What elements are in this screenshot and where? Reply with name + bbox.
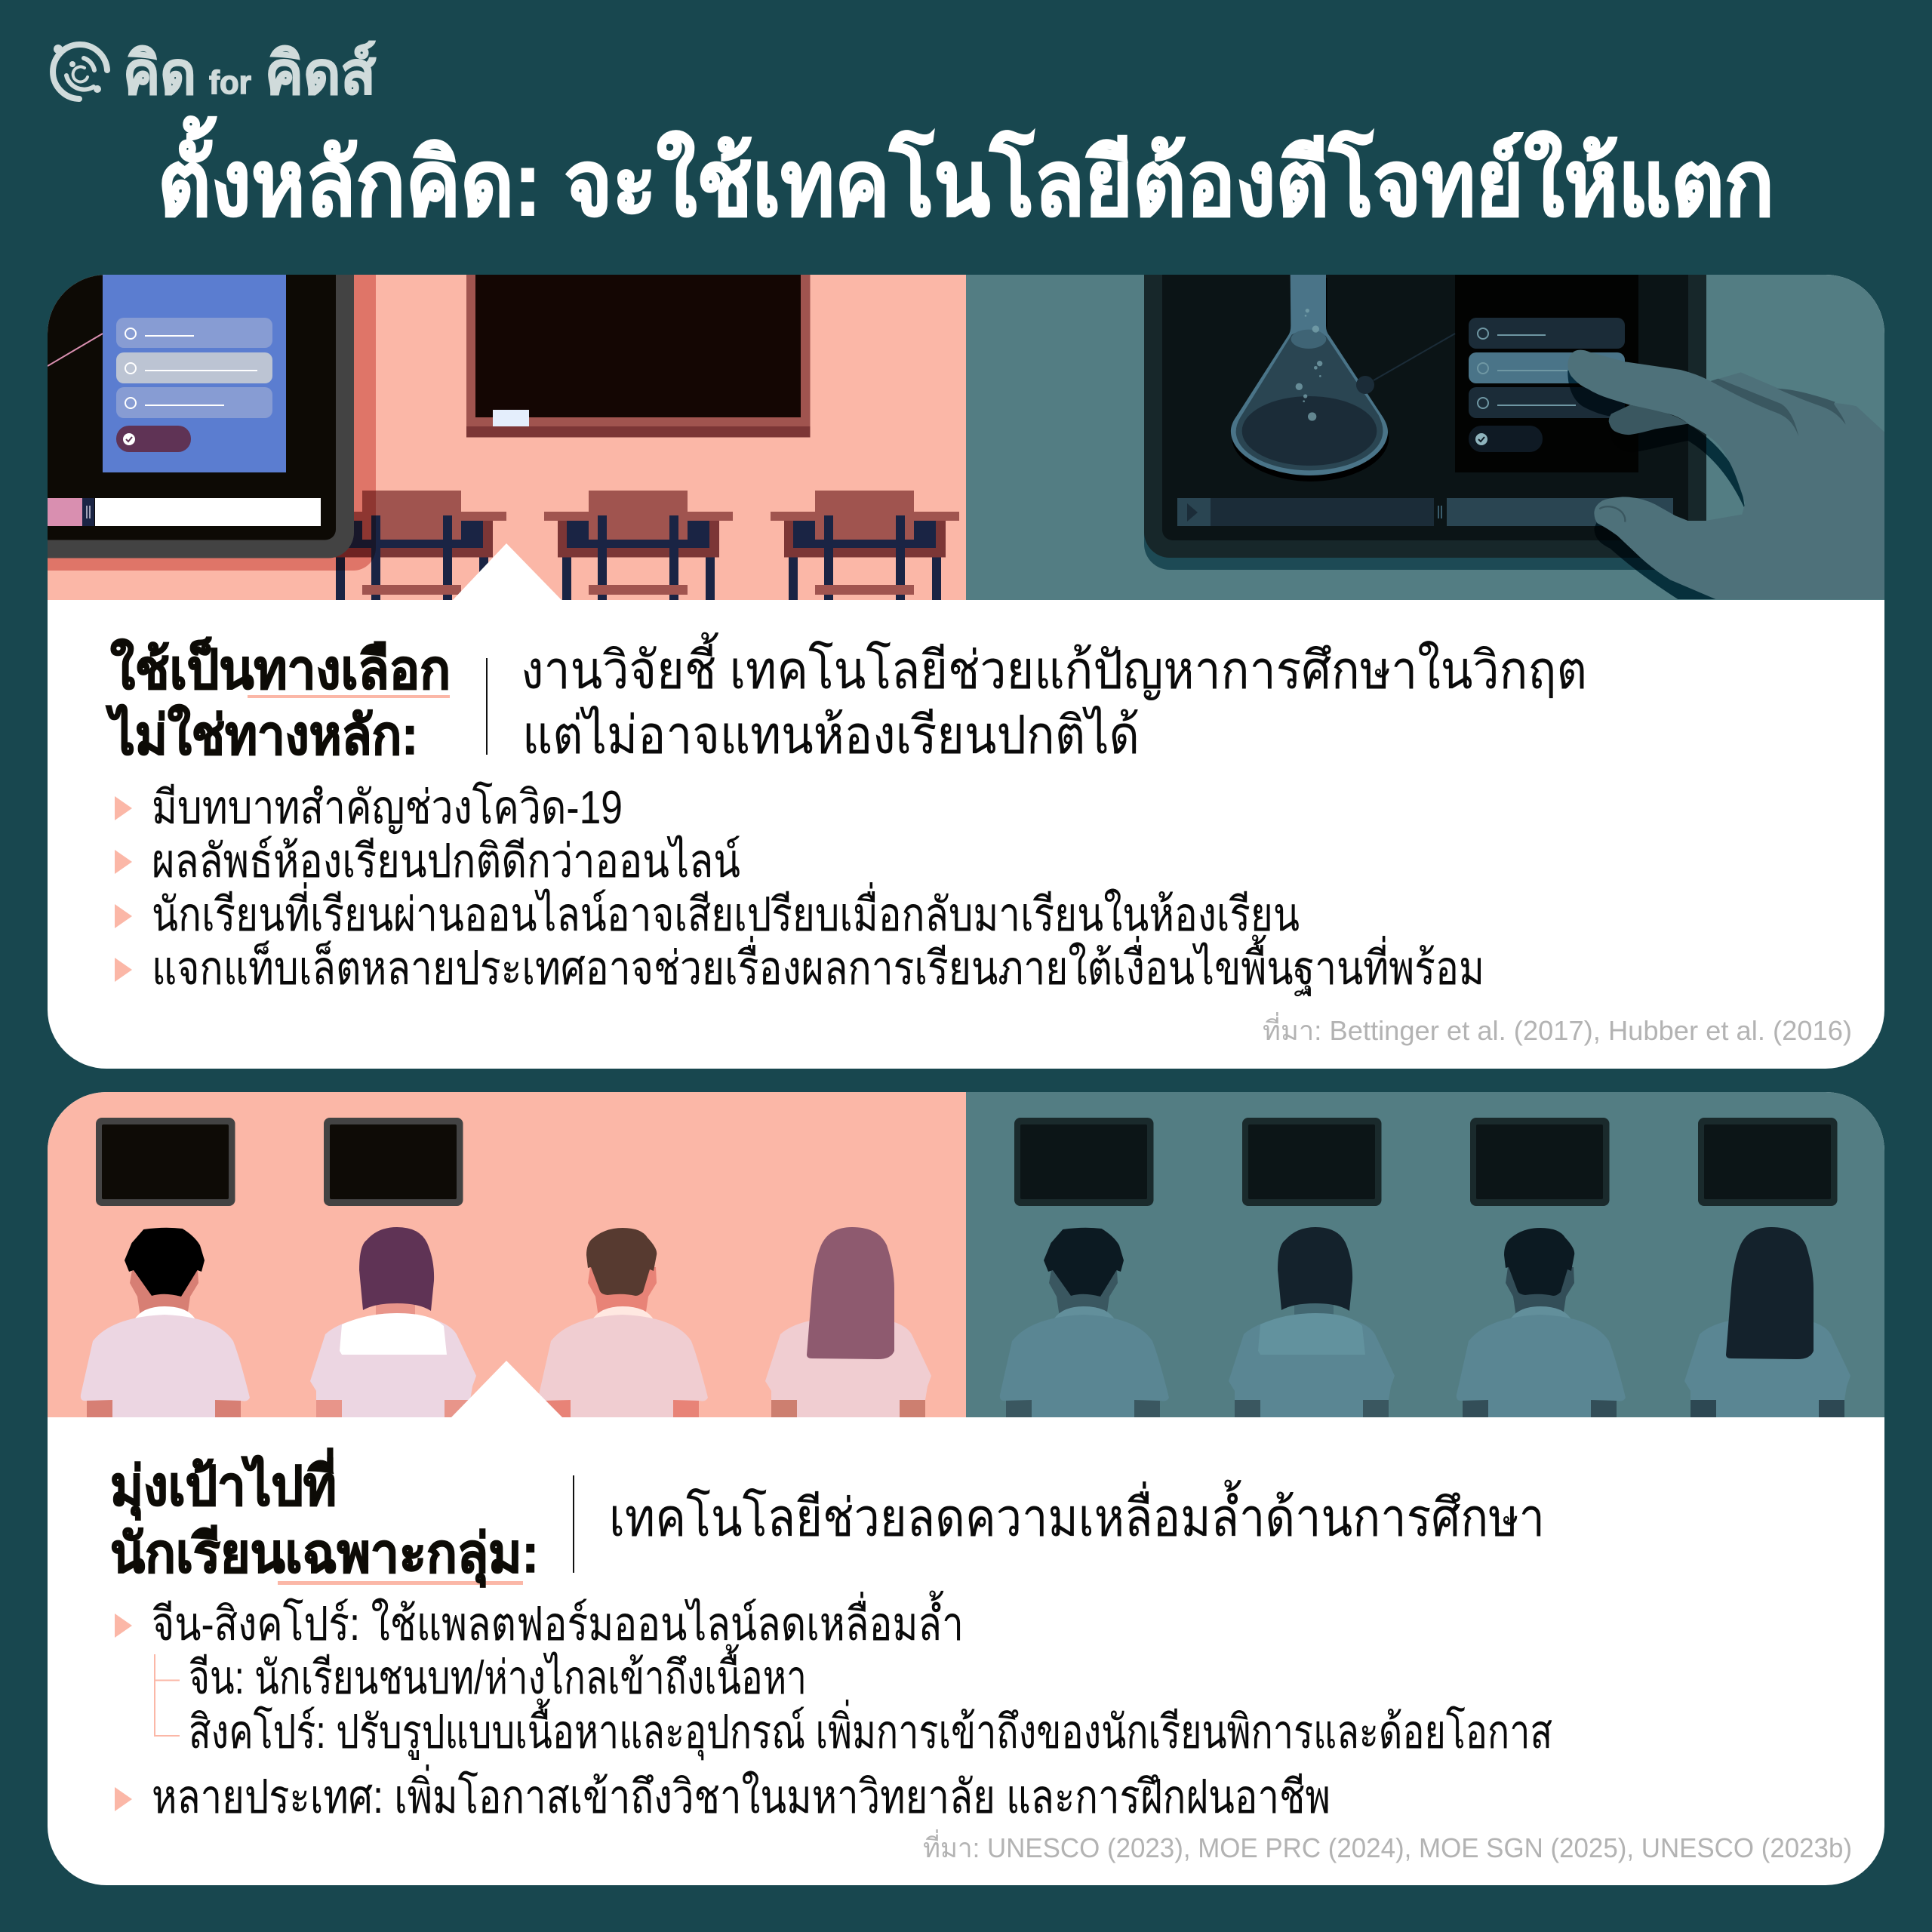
student 2 bbox=[310, 1227, 476, 1417]
tablet left bbox=[48, 275, 376, 571]
title: ตั้งหลักคิด: จะใช้เทคโนโลยีต้องตีโจทย์ให้แตก bbox=[158, 116, 1774, 235]
main statement: เทคโนโลยีช่วยลดความเหลื่อมล้ำด้านการศึกษา bbox=[609, 1479, 1545, 1547]
illustration: students and tablets bbox=[48, 1092, 1884, 1417]
tablet right bbox=[1144, 275, 1706, 570]
blackboard bbox=[466, 275, 811, 438]
pointer bbox=[451, 1361, 562, 1417]
icon: logo mark bbox=[53, 45, 107, 99]
main statement bbox=[521, 632, 1587, 764]
bullet list: ผลลัพธ์ห้องเรียนปกติดีกว่าออนไลน์ bbox=[152, 835, 740, 888]
bullet list: แจกแท็บเล็ตหลายประเทศอาจช่วยเรื่องผลการเรียนภายใต้เงื่อนไขพื้นฐานที่พร้อม bbox=[152, 934, 1484, 996]
panel: top bbox=[0, 226, 1889, 1069]
student 2 dark bbox=[1229, 1227, 1395, 1417]
pointer bbox=[453, 543, 561, 600]
heading: target students: มุ่งเป้าไปที่ bbox=[110, 1447, 337, 1521]
bullet list: สิงคโปร์: ปรับรูปแบบเนื้อหาและอุปกรณ์ เพิ่มการเข้าถึงของนักเรียนพิการและด้อยโอกาส bbox=[189, 1698, 1552, 1760]
bullet list: นักเรียนที่เรียนผ่านออนไลน์อาจเสียเปรียบเมื่อกลับมาเรียนในห้องเรียน bbox=[152, 882, 1300, 941]
logo bbox=[53, 40, 376, 106]
student 1 dark bbox=[1000, 1228, 1169, 1417]
desks bbox=[318, 491, 959, 600]
bullet list: หลายประเทศ: เพิ่มโอกาสเข้าถึงวิชาในมหาวิทยาลัย และการฝึกฝนอาชีพ bbox=[152, 1764, 1331, 1823]
heading: use as option bbox=[106, 637, 451, 766]
bullet list: จีน-สิงคโปร์: ใช้แพลตฟอร์มออนไลน์ลดเหลื่อมล้ำ bbox=[152, 1590, 964, 1651]
hand bbox=[1567, 350, 1889, 599]
heading: target students bbox=[110, 1447, 539, 1588]
main statement: งานวิจัยชี้ เทคโนโลยีช่วยแก้ปัญหาการศึกษาในวิกฤต bbox=[521, 632, 1587, 700]
main statement: แต่ไม่อาจแทนห้องเรียนปกติได้ bbox=[522, 706, 1140, 764]
heading: use as option: ใช้เป็นทางเลือก bbox=[110, 637, 451, 700]
student 4 dark bbox=[1684, 1227, 1850, 1417]
panel: bottom bbox=[48, 1092, 1884, 1885]
bullet list bbox=[115, 1590, 1552, 1823]
bullet list: มีบทบาทสำคัญช่วงโควิด-19 bbox=[152, 781, 623, 834]
bullet list: จีน: นักเรียนชนบท/ห่างไกลเข้าถึงเนื้อหา bbox=[189, 1644, 807, 1704]
illustration: online classroom bbox=[48, 275, 1884, 600]
logo wordmark: คิด bbox=[123, 40, 196, 106]
student 3 bbox=[539, 1228, 708, 1417]
bullet list bbox=[115, 781, 1484, 996]
heading: use as option: ไม่ใช่ทางหลัก: bbox=[106, 703, 418, 766]
student 4 bbox=[765, 1227, 931, 1417]
logo wordmark bbox=[123, 40, 376, 106]
student 3 dark bbox=[1457, 1228, 1626, 1417]
source: ที่มา: UNESCO (2023), MOE PRC (2024), MOE SGN (2025), UNESCO (2023b) bbox=[923, 1829, 1852, 1863]
logo wordmark: คิดส์ bbox=[265, 40, 376, 106]
source: ที่มา: Bettinger et al. (2017), Hubber et al. (2016) bbox=[1263, 1012, 1852, 1046]
heading: target students: นักเรียนเฉพาะกลุ่ม: bbox=[110, 1524, 539, 1588]
student 1 bbox=[81, 1228, 250, 1417]
logo wordmark: for bbox=[209, 64, 251, 101]
tablets bbox=[96, 1118, 1837, 1206]
flask bbox=[1231, 275, 1455, 481]
right scene background bbox=[966, 275, 1884, 600]
